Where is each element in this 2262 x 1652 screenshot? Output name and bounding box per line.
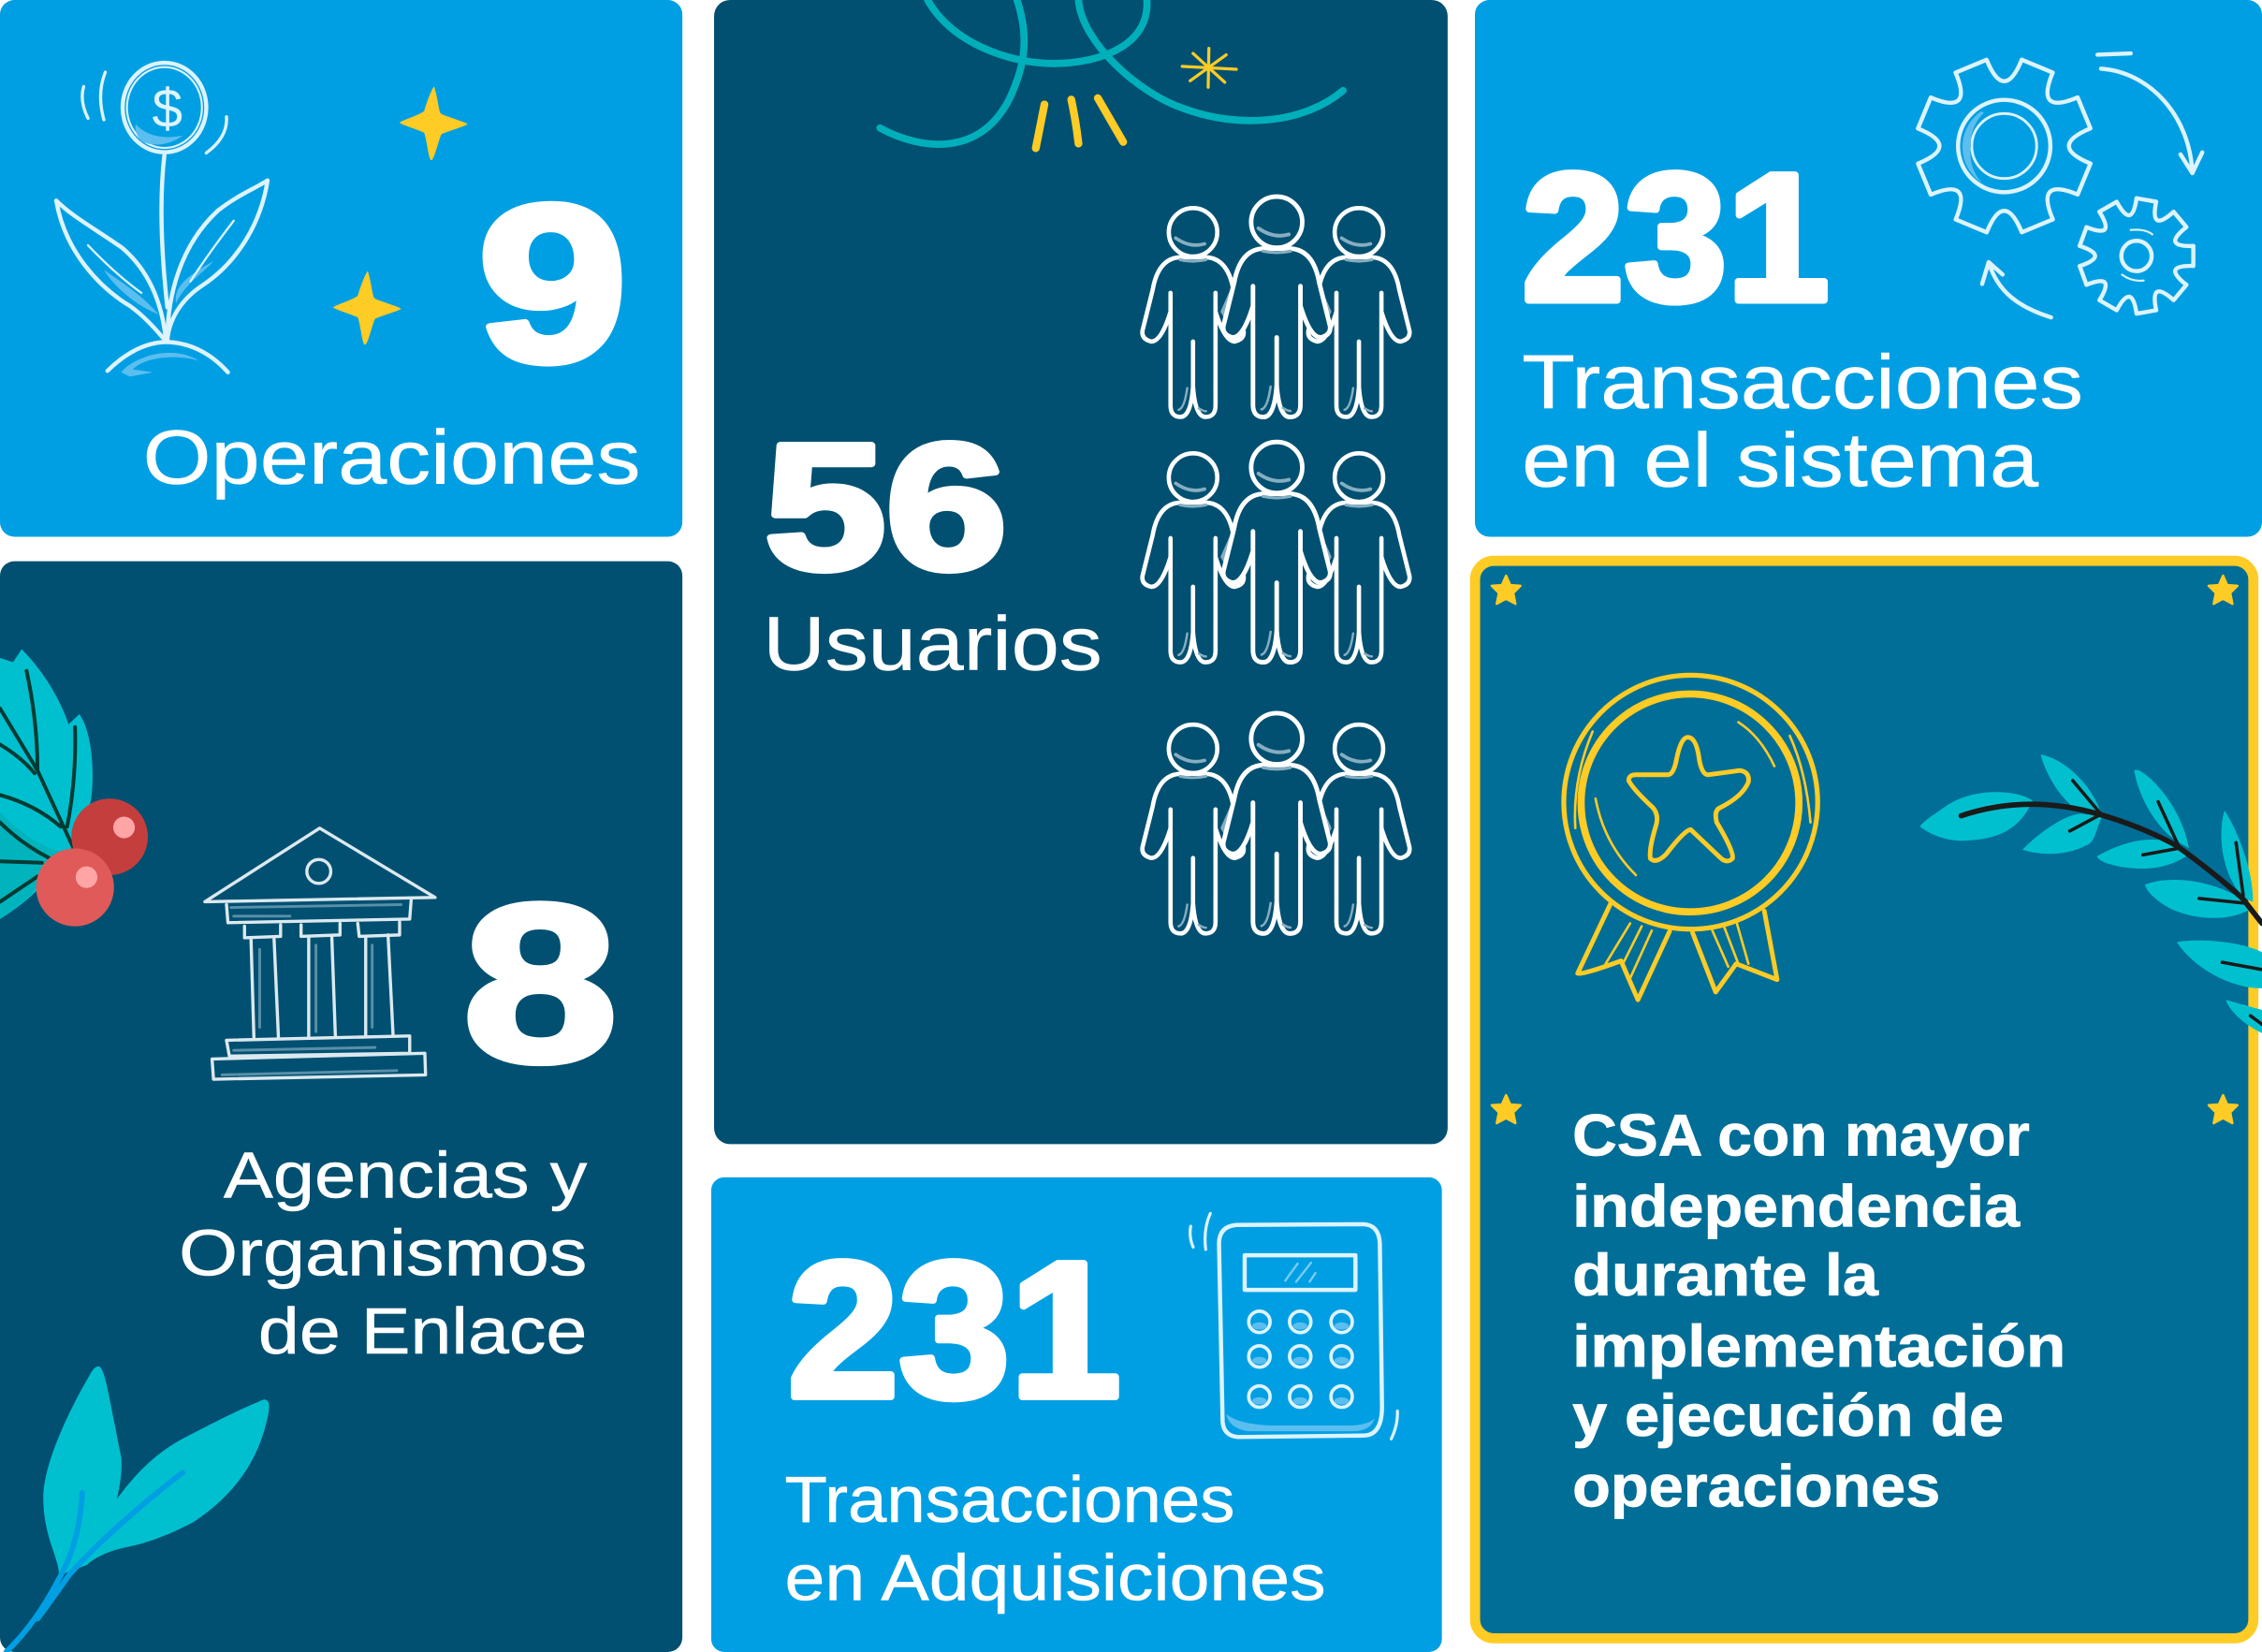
panel: usuarios xyxy=(714,0,1448,1144)
icon: large gear xyxy=(1905,48,2103,244)
label transacciones sistema xyxy=(1522,340,2083,503)
text: CSA statement: implementación xyxy=(1572,1314,2065,1380)
label agencias: Agencias y xyxy=(224,1138,588,1211)
icon: rotation arrow top xyxy=(2097,53,2202,173)
icon: yellow sparkle top xyxy=(400,87,467,160)
label transacciones sistema: en el sistema xyxy=(1522,417,2039,503)
icon: holly leaf xyxy=(0,650,93,919)
panel: transacciones adquisiciones xyxy=(711,1177,1442,1652)
text: CSA statement xyxy=(1572,1104,2065,1519)
number 9: 9 xyxy=(477,158,628,408)
icon: yellow sparkle bottom xyxy=(333,271,401,344)
icon: people row 1 xyxy=(1143,197,1409,417)
icon: medal xyxy=(1564,675,1817,1000)
icon: rotation arrow bottom xyxy=(1982,262,2051,317)
decoration: teal loops xyxy=(880,0,1343,144)
icon: teal leaves xyxy=(7,1367,270,1652)
label operaciones: Operaciones xyxy=(143,415,640,500)
decoration: yellow asterisk xyxy=(1182,49,1236,87)
label transacciones adquisiciones: Transacciones xyxy=(785,1463,1234,1536)
label agencias xyxy=(179,1138,588,1367)
icon: bank building xyxy=(205,828,435,1079)
icon: leafy branch xyxy=(1920,754,2262,1033)
label agencias: Organismos xyxy=(179,1217,587,1290)
number 231: 231 xyxy=(1522,137,1830,340)
label transacciones adquisiciones: en Adquisiciones xyxy=(785,1541,1326,1614)
label transacciones sistema: Transacciones xyxy=(1522,340,2083,425)
panel: agencias xyxy=(0,562,682,1652)
label agencias: de Enlace xyxy=(258,1294,587,1367)
panel: operaciones xyxy=(0,0,682,536)
icon: calculator xyxy=(1190,1213,1397,1439)
label transacciones adquisiciones xyxy=(785,1463,1326,1614)
text: CSA statement: operaciones xyxy=(1572,1454,1940,1519)
label usuarios: Usuarios xyxy=(763,601,1102,686)
number 56: 56 xyxy=(765,406,1007,607)
number 8: 8 xyxy=(463,858,618,1108)
panel: CSA highlighted xyxy=(1475,561,2262,1638)
icon: people row 3 xyxy=(1143,713,1409,933)
text: CSA statement: durante la xyxy=(1572,1243,1879,1308)
number 231: 231 xyxy=(788,1221,1121,1438)
text: CSA statement: CSA con mayor xyxy=(1572,1104,2030,1169)
decoration: yellow rays xyxy=(1036,98,1123,148)
icon: money plant xyxy=(56,63,268,376)
panel: transacciones sistema xyxy=(1475,0,2262,536)
icon: small gear xyxy=(2073,192,2198,317)
text: CSA statement: independencia xyxy=(1572,1174,2021,1239)
corner stars xyxy=(1492,576,2238,1123)
text: CSA statement: y ejecución de xyxy=(1572,1383,2004,1449)
icon: money plant: $ xyxy=(153,79,182,139)
icon: red berries xyxy=(36,798,148,927)
icon: people row 2 xyxy=(1143,442,1409,663)
